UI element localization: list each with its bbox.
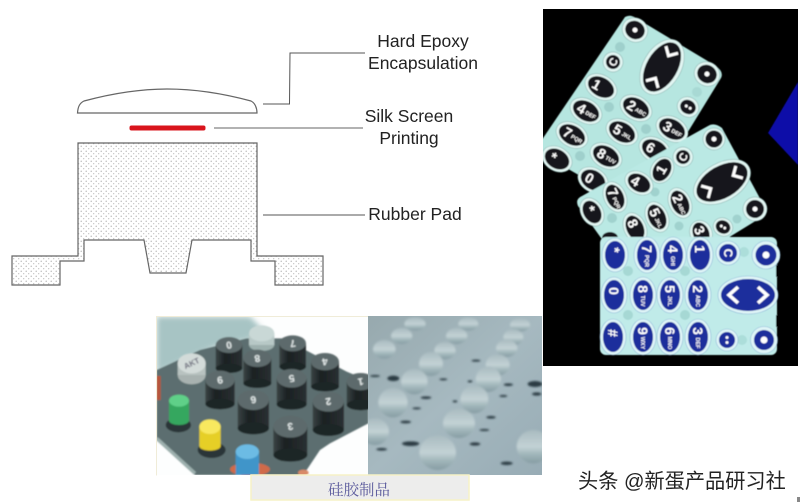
keypad 3: PQR xyxy=(643,255,649,267)
keypad 1: TUV xyxy=(604,155,617,166)
cylinders xyxy=(216,337,242,373)
keypad 3: 8 xyxy=(635,285,651,293)
cylinders: 0 xyxy=(225,338,233,350)
keypad 3: C xyxy=(721,249,735,258)
keypad 3: DEF xyxy=(694,338,700,349)
keypad 1 xyxy=(543,15,723,192)
side-light keys: 5 xyxy=(287,372,295,383)
photo: domes on translucent silicone xyxy=(361,316,550,475)
keypad 3: 5 xyxy=(662,285,678,293)
keypad 3: 0 xyxy=(606,287,622,295)
keypad 2: 4 xyxy=(628,172,643,190)
red silk screen print xyxy=(130,126,206,130)
caption text: 硅胶制品 xyxy=(328,481,390,499)
side-light keys: 2 xyxy=(324,395,332,406)
watermark: 头条 @新蛋产品研习社 xyxy=(578,470,786,493)
keypad 1: 5 xyxy=(610,121,625,138)
side-light keys: 1 xyxy=(356,375,364,387)
blue wedge xyxy=(768,82,798,165)
keypad 1: 1 xyxy=(589,76,604,93)
keypad 3: 4 xyxy=(665,245,681,253)
keypad 1: JKL xyxy=(620,132,633,142)
keypad 2: PQR xyxy=(610,197,621,210)
keypad 3: 7 xyxy=(639,245,655,253)
keypad 1: 8 xyxy=(594,145,609,162)
keypad 1: 6 xyxy=(643,139,658,156)
keypad 1: ABC xyxy=(634,107,647,118)
keypad 1: 7 xyxy=(560,124,575,141)
keypad 2: ABC xyxy=(675,203,686,216)
keypad 3: 3 xyxy=(690,327,706,335)
keypad 1: DEF xyxy=(670,128,683,139)
side-light keys xyxy=(157,325,375,476)
keypad 3: 1 xyxy=(692,245,708,253)
side-light keys: 8 xyxy=(253,352,261,363)
keypad 2: 2 xyxy=(669,192,687,206)
photo: three keypads on black xyxy=(535,9,798,366)
keypad 3: MNO xyxy=(666,337,672,350)
caption box xyxy=(251,475,469,500)
keypad 3: 9 xyxy=(635,327,651,335)
keypad body xyxy=(157,338,368,475)
keypad 3: TUV xyxy=(639,296,645,307)
body light edge xyxy=(157,438,195,473)
keypad 1: 2 xyxy=(624,97,639,114)
keypad 1: * xyxy=(547,149,560,166)
keypad 3: * xyxy=(607,247,623,253)
side-light keys: 7 xyxy=(288,337,296,348)
side-light keys: AKT xyxy=(182,356,201,371)
keypad 2: 5 xyxy=(646,206,664,220)
side-light keys: 9 xyxy=(216,373,224,385)
keypad 1: 3 xyxy=(660,118,675,135)
keypad 3: 2 xyxy=(690,285,706,293)
keypad 3: ABC xyxy=(694,295,700,307)
keypad 3: WXY xyxy=(639,337,645,350)
keypad 3 xyxy=(600,237,780,355)
label: Hard Epoxy Encapsulation: Hard Epoxy xyxy=(377,31,469,51)
epoxy dome xyxy=(78,89,257,113)
leader line: epoxy xyxy=(263,53,365,104)
keypad 2: 7 xyxy=(604,186,622,200)
leader line: silk screen xyxy=(214,127,363,129)
keypad 2: * xyxy=(582,203,599,216)
keypad 3: 6 xyxy=(662,327,678,335)
keypad 2: 3 xyxy=(691,223,709,237)
label: Silk Screen Printing: Silk Screen xyxy=(365,106,453,126)
blurred background xyxy=(157,317,263,373)
photo: rubber keypad with cylinders xyxy=(157,316,375,476)
keypad 1: DEF xyxy=(584,110,597,121)
side-light keys: 3 xyxy=(286,420,294,431)
keypad 2 xyxy=(576,124,768,240)
keypad 3: GHI xyxy=(669,256,675,266)
label: Silk Screen Printing: Printing xyxy=(379,128,439,148)
keypad 1: 0 xyxy=(582,169,597,187)
keypad 1: C xyxy=(607,56,621,69)
keypad 2: 8 xyxy=(624,217,642,231)
keypad 3: # xyxy=(605,329,621,337)
leader line: rubber pad xyxy=(263,214,365,216)
domes xyxy=(361,317,550,470)
corner mark xyxy=(797,497,800,502)
rubber pad xyxy=(12,143,323,285)
keypad 3: JKL xyxy=(666,296,672,307)
keypad 2: JKL xyxy=(653,217,663,230)
coloured keys xyxy=(166,418,191,432)
diagram: keypad cross-section xyxy=(12,89,323,285)
keypad 1: 4 xyxy=(574,100,589,117)
keypad 2: C xyxy=(677,151,691,164)
label: Rubber Pad: Rubber Pad xyxy=(368,204,462,224)
dark specks xyxy=(370,360,542,465)
side-light keys: 4 xyxy=(321,355,329,367)
label: Hard Epoxy Encapsulation: Encapsulation xyxy=(368,53,478,73)
keypad 2: 1 xyxy=(652,162,670,177)
side-light keys: 6 xyxy=(249,393,257,405)
thin photo frame xyxy=(156,316,368,476)
keypad 1: PQR xyxy=(570,134,583,145)
